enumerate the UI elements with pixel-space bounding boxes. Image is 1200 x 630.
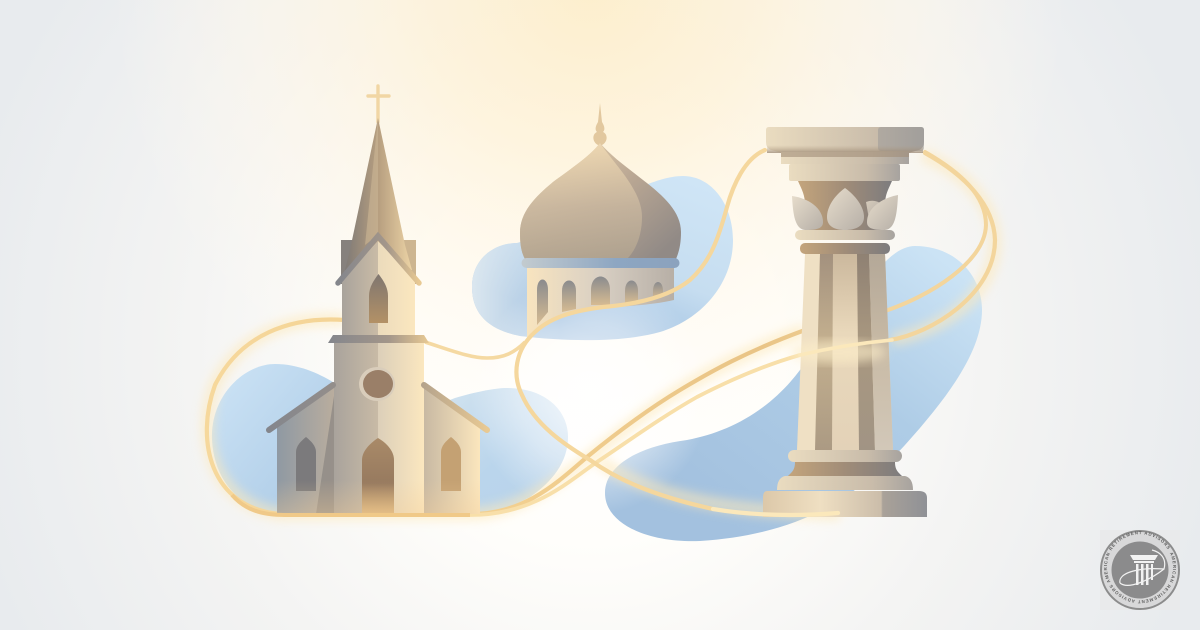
central light glow xyxy=(470,275,710,515)
ribbon glow xyxy=(208,155,995,514)
dome finial xyxy=(593,103,607,145)
spire xyxy=(345,118,412,270)
ribbon: church to dome connector xyxy=(425,342,525,358)
blue blob: behind column xyxy=(605,246,982,541)
ribbon: right loops around column xyxy=(885,152,995,340)
cross xyxy=(368,86,389,122)
ring mouldings xyxy=(795,230,895,240)
wing roofs xyxy=(269,385,487,430)
blue blob: behind dome xyxy=(472,176,733,340)
left wing xyxy=(277,386,334,514)
gable roof xyxy=(338,236,419,283)
dome highlight panel xyxy=(520,143,642,259)
lotus petals xyxy=(792,188,898,230)
light band across shaft xyxy=(790,341,886,363)
door xyxy=(362,438,394,514)
belfry window xyxy=(369,274,388,323)
upper mouldings xyxy=(781,152,909,164)
right window xyxy=(441,437,461,491)
ribbon: highlights crossing column xyxy=(713,340,892,515)
blue blob: behind church right xyxy=(424,388,568,514)
capital neck xyxy=(798,181,892,232)
dome building xyxy=(520,103,681,340)
tower back blocks xyxy=(341,240,416,284)
logo swoosh xyxy=(1120,550,1165,585)
fluted shaft xyxy=(797,254,893,451)
ribbon: church loop to column, upper strand xyxy=(207,319,805,514)
cornice xyxy=(328,335,429,343)
ribbon: dome swoop and long loop to column base xyxy=(516,150,765,509)
warm bottom wash xyxy=(277,480,480,514)
right wing xyxy=(424,386,480,514)
logo column mark xyxy=(1130,555,1158,585)
drum xyxy=(527,267,674,340)
logo ring text: bottom: AMERICAN RETIREMENT ADVISORS xyxy=(1110,552,1176,604)
ribbon: lower strand to column loop xyxy=(470,355,800,515)
logo badge xyxy=(1100,530,1180,610)
upper tower xyxy=(342,241,415,336)
church xyxy=(269,86,487,514)
ribbon: church base line in front xyxy=(232,495,470,515)
base mouldings xyxy=(788,450,902,462)
plinth xyxy=(763,491,927,517)
blue band xyxy=(522,258,680,268)
abacus xyxy=(766,127,924,153)
column xyxy=(763,127,927,517)
blue blob: behind church left xyxy=(212,364,336,514)
onion dome xyxy=(520,143,681,259)
logo ring text: top: AMERICAN RETIREMENT ADVISORS xyxy=(1104,531,1170,582)
drum windows xyxy=(537,276,663,325)
left window xyxy=(296,437,316,491)
main tower xyxy=(334,343,379,514)
round window xyxy=(359,367,395,401)
